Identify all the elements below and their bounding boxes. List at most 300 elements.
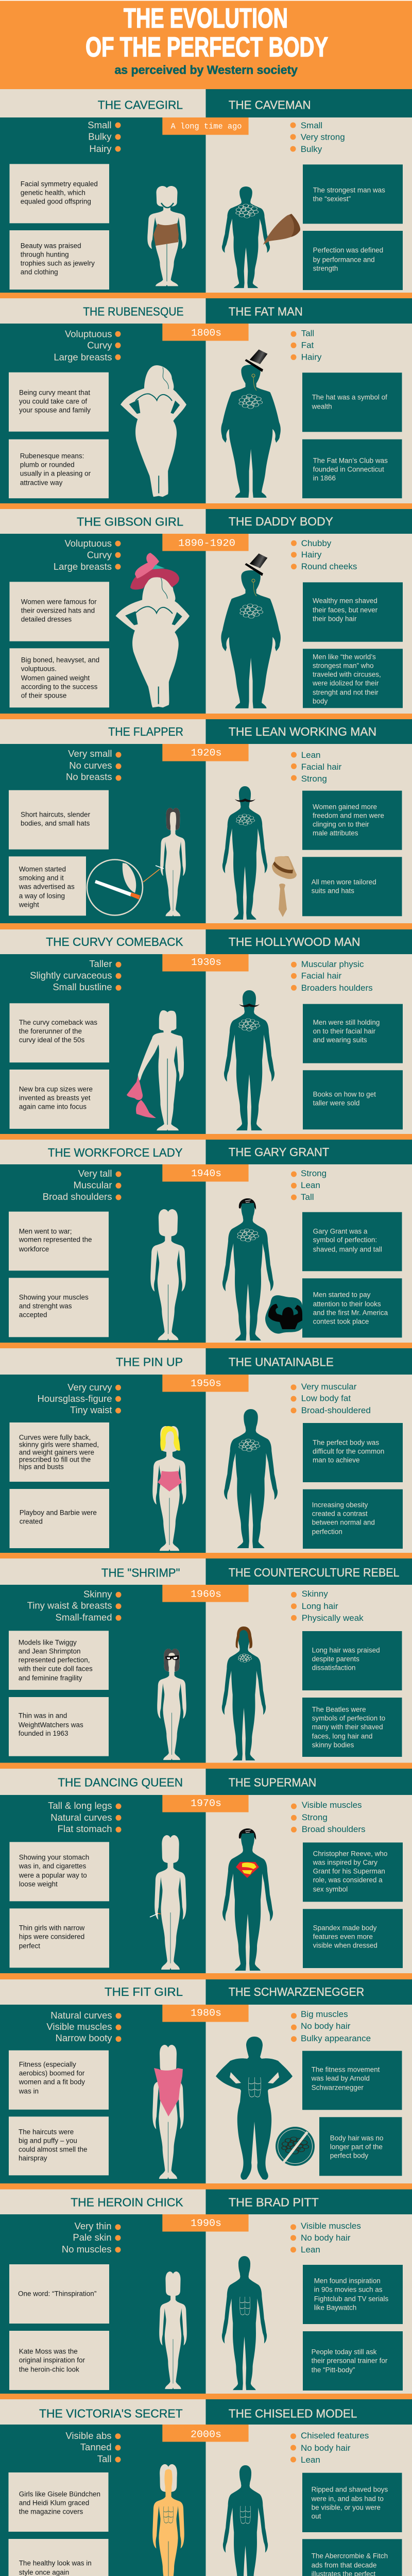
text box xyxy=(303,649,403,708)
section: 1930s xyxy=(0,929,412,1140)
text box: be visible, or you were xyxy=(312,2503,381,2511)
traits: curvy comeback: Slightly curvaceous xyxy=(30,970,112,981)
text box xyxy=(9,230,109,290)
text box: freedom and men were xyxy=(313,811,384,819)
text box xyxy=(302,1278,402,1337)
date tab: A long time ago xyxy=(171,122,242,131)
text box: original inspiration for xyxy=(19,2356,85,2364)
text box: women represented the xyxy=(19,1236,92,1244)
traits: dancing queen: Natural curves xyxy=(50,1812,112,1823)
heading: the rubenesque: THE RUBENESQUE xyxy=(83,304,184,318)
traits: chiseled model: Lean xyxy=(301,2455,320,2465)
text box: Gary Grant was a xyxy=(313,1227,368,1235)
figure: curvy comeback with bra xyxy=(127,1010,184,1130)
text box: Long hair was praised xyxy=(312,1647,380,1654)
text box xyxy=(319,2117,402,2176)
text box xyxy=(303,1004,403,1063)
text box xyxy=(9,1697,109,1756)
text box: Men were still holding xyxy=(313,1019,380,1026)
traits: superman: Strong xyxy=(302,1812,328,1822)
heading: the chiseled model: THE CHISELED MODEL xyxy=(229,2407,357,2420)
figure: victoria's secret xyxy=(152,2464,184,2576)
text box: Rubenesque means: xyxy=(20,452,84,460)
text box: perfection xyxy=(312,1528,342,1535)
traits: gary grant xyxy=(291,1168,327,1202)
text box: traveled with circuses, xyxy=(313,670,381,678)
text box: the forerunner of the xyxy=(19,1027,82,1035)
text box xyxy=(9,648,109,707)
text box: the “sexiest” xyxy=(313,195,351,202)
date tab: 1890-1920 xyxy=(178,537,235,549)
traits: cavegirl: Small xyxy=(88,120,111,130)
text box: The Beatles were xyxy=(312,1705,366,1713)
heading: the shrimp: THE "SHRIMP" xyxy=(101,1566,180,1580)
text box: according to the success xyxy=(21,683,98,690)
text box: a way of losing xyxy=(19,892,65,900)
text box xyxy=(9,372,109,432)
heading: the superman: THE SUPERMAN xyxy=(229,1776,316,1789)
text box: Facial symmetry equaled xyxy=(21,180,98,188)
text box: The hat was a symbol of xyxy=(312,394,387,401)
text box: Big boned, heavyset, and xyxy=(21,656,99,664)
date tab: 1930s xyxy=(191,957,221,968)
text box: shaved, manly and tall xyxy=(313,1245,382,1253)
section background xyxy=(0,1979,412,2190)
date tab: 1970s xyxy=(191,1798,221,1809)
text box: hips were considered xyxy=(19,1933,84,1940)
traits: brad pitt: Lean xyxy=(301,2245,320,2255)
text box: and the first Mr. America xyxy=(313,1309,388,1316)
text box: hairspray xyxy=(19,2154,47,2162)
section background xyxy=(0,1140,412,1349)
figure: cavegirl xyxy=(147,186,186,286)
traits: counterculture rebel: Long hair xyxy=(302,1601,338,1611)
section background xyxy=(0,929,412,1140)
traits: shrimp: Small-framed xyxy=(56,1612,112,1622)
traits: fat man: Fat xyxy=(301,340,314,350)
text box: workforce xyxy=(19,1245,49,1253)
section: 1960s xyxy=(0,1558,412,1769)
section: 1970s xyxy=(0,1769,412,1979)
heading: the flapper: THE FLAPPER xyxy=(108,725,183,738)
date tab xyxy=(162,324,249,341)
text box: Fightclub and TV serials xyxy=(314,2295,389,2302)
heading: the dancing queen: THE DANCING QUEEN xyxy=(58,1776,183,1789)
text box: Women gained more xyxy=(313,803,377,810)
section background xyxy=(0,1348,412,1558)
traits: chiseled model xyxy=(290,2431,369,2465)
text box: again came into focus xyxy=(19,1103,87,1110)
traits: cavegirl xyxy=(88,120,121,154)
text box xyxy=(303,1489,403,1549)
date tab: 1990s xyxy=(191,2217,221,2229)
text box: and wearing suits xyxy=(313,1036,367,1044)
text box xyxy=(302,439,402,498)
heading: the brad pitt: THE BRAD PITT xyxy=(229,2196,319,2209)
text box: role, was considered a xyxy=(313,1876,383,1884)
text box: founded in Connecticut xyxy=(313,465,384,473)
text box: The curvy comeback was xyxy=(19,1019,97,1026)
text box: the magazine covers xyxy=(19,2507,83,2515)
text box: strength xyxy=(313,264,338,272)
date tab xyxy=(162,534,249,551)
date tab: 1980s xyxy=(191,2008,221,2019)
text box: Schwarzenegger xyxy=(312,2083,364,2091)
section: 1980s xyxy=(0,1979,412,2190)
text box: features even more xyxy=(313,1933,373,1940)
heading: the schwarzenegger: THE SCHWARZENEGGER xyxy=(229,1985,364,1998)
text box: loose weight xyxy=(19,1880,58,1888)
traits: heroin chick xyxy=(62,2221,121,2255)
text box xyxy=(9,439,109,498)
heading: the daddy body: THE DADDY BODY xyxy=(229,515,333,528)
text box: hips and busts xyxy=(19,1463,64,1470)
text box: Men like “the world’s xyxy=(313,653,376,660)
traits: schwarzenegger: Big muscles xyxy=(301,2009,348,2019)
text box: created xyxy=(20,1517,43,1525)
text box: male attributes xyxy=(313,829,358,837)
traits: rubenesque: Curvy xyxy=(87,340,112,350)
heading: the fat man: THE FAT MAN xyxy=(229,304,303,318)
figure: schwarzenegger xyxy=(216,2037,293,2180)
traits: fit girl: Narrow booty xyxy=(55,2032,112,2043)
heading: the lean working man: THE LEAN WORKING MAN xyxy=(229,725,376,738)
traits: shrimp: Tiny waist & breasts xyxy=(27,1600,112,1611)
text box: skinny bodies xyxy=(312,1741,354,1749)
date tab: 2000s xyxy=(191,2429,221,2441)
figure: shrimp with glasses xyxy=(157,1649,186,1760)
text box: contest took place xyxy=(313,1317,369,1325)
traits: fat man: Tall xyxy=(301,328,314,338)
traits: gary grant: Strong xyxy=(301,1168,327,1178)
traits: brad pitt: No body hair xyxy=(301,2233,351,2243)
text box: attention to their looks xyxy=(313,1300,381,1308)
traits: flapper xyxy=(66,748,122,782)
text box: curvy ideal of the 50s xyxy=(19,1036,85,1044)
traits: caveman: Very strong xyxy=(301,132,345,142)
text box: Girls like Gisele Bündchen xyxy=(19,2490,100,2498)
traits: caveman xyxy=(290,121,345,154)
section background xyxy=(0,1769,412,1979)
text box: Men found inspiration xyxy=(314,2277,381,2284)
traits: pin up: Tiny waist xyxy=(70,1404,112,1415)
figure: hollywood man xyxy=(224,990,274,1130)
text box: strenght and not their xyxy=(313,689,379,697)
text box: was inspired by Cary xyxy=(313,1858,377,1866)
text box: sex symbol xyxy=(313,1885,348,1893)
text box: Women started xyxy=(19,865,66,873)
figure: chiseled model xyxy=(223,2465,268,2576)
text box xyxy=(303,1070,403,1129)
text box: like Baywatch xyxy=(314,2303,356,2311)
text box: strongest man” who xyxy=(313,662,374,670)
traits: chiseled model: Chiseled features xyxy=(301,2431,369,2441)
text box: Showing your stomach xyxy=(19,1854,89,1861)
text box: smoking and it xyxy=(19,874,64,882)
text box: Books on how to get xyxy=(313,1090,376,1098)
text box xyxy=(9,1631,109,1690)
text box: Men started to pay xyxy=(313,1291,371,1298)
text box: The healthy look was in xyxy=(19,2559,92,2567)
text box: their body hair xyxy=(313,615,357,623)
traits: rubenesque xyxy=(54,328,121,362)
figure: counterculture rebel xyxy=(222,1626,266,1760)
text box: big and puffy – you xyxy=(19,2137,77,2144)
heading: the pin up: THE PIN UP xyxy=(116,1355,183,1369)
text box: by performance and xyxy=(313,256,375,263)
traits: gary grant: Tall xyxy=(301,1192,314,1202)
text box: Increasing obesity xyxy=(312,1501,368,1509)
traits: workforce lady xyxy=(43,1168,122,1202)
traits: counterculture rebel: Skinny xyxy=(302,1589,328,1599)
text box xyxy=(9,1908,109,1968)
text box: man to achieve xyxy=(313,1456,360,1464)
text box: the “Pitt-body” xyxy=(312,2366,355,2374)
traits: unatainable: Very muscular xyxy=(301,1382,357,1392)
text box: your spouse and family xyxy=(19,406,91,414)
figure: brad pitt xyxy=(222,2256,267,2390)
text box xyxy=(9,856,86,916)
traits: heroin chick: Pale skin xyxy=(73,2232,111,2243)
figure: fit girl in leotard xyxy=(152,2045,184,2179)
heading: the victoria's secret: THE VICTORIA'S SECRET xyxy=(39,2407,183,2420)
heading: the cavegirl: THE CAVEGIRL xyxy=(98,98,183,112)
text box: was in xyxy=(19,2087,39,2095)
text box: faces, long hair and xyxy=(312,1732,372,1740)
traits: heroin chick: No muscles xyxy=(62,2244,111,2255)
figure: flapper with cigarette xyxy=(156,808,186,916)
section background xyxy=(0,719,412,929)
traits: victoria's secret: Tanned xyxy=(80,2442,111,2452)
icon: muscle man badge xyxy=(265,1295,302,1334)
date tab xyxy=(162,744,249,761)
text box: the heroin-chic look xyxy=(19,2365,79,2373)
text box: Spandex made body xyxy=(313,1924,377,1931)
text box: could almost smell the xyxy=(19,2145,88,2153)
traits: shrimp: Skinny xyxy=(83,1588,112,1599)
traits: rubenesque: Voluptuous xyxy=(65,328,112,339)
text box: The Abercrombie & Fitch xyxy=(312,2552,388,2560)
traits: brad pitt xyxy=(290,2221,361,2255)
text box: their oversized hats and xyxy=(21,606,95,614)
text box: you could take care of xyxy=(19,398,87,405)
figure: pin up xyxy=(152,1426,186,1551)
date tab: 1940s xyxy=(191,1168,221,1179)
traits: hollywood man: Muscular physic xyxy=(301,959,364,969)
text box: Ripped and shaved boys xyxy=(312,2485,388,2493)
section: 1950s xyxy=(0,1348,412,1558)
text box: genetic health, which xyxy=(21,189,85,197)
heading: the heroin chick: THE HEROIN CHICK xyxy=(71,2196,183,2209)
traits: pin up: Hoursglass-figure xyxy=(38,1393,112,1404)
text box: skinny girls were shamed, xyxy=(19,1440,99,1448)
text box: accepted xyxy=(19,1311,47,1318)
text box: Thin was in and xyxy=(19,1711,67,1719)
text box: Grant for his Superman xyxy=(313,1867,385,1875)
figure: lean working man xyxy=(222,786,267,920)
section: 1920s xyxy=(0,719,412,929)
traits: rubenesque: Large breasts xyxy=(54,351,112,362)
traits: chiseled model: No body hair xyxy=(301,2443,351,2453)
text box: difficult for the common xyxy=(313,1447,384,1455)
traits: lean working man: Strong xyxy=(301,774,327,784)
traits: workforce lady: Broad shoulders xyxy=(43,1191,112,1202)
icon: no body hair badge xyxy=(276,2127,315,2166)
figure: heroin chick xyxy=(159,2272,187,2389)
text box xyxy=(303,231,403,290)
text box xyxy=(302,791,402,850)
traits: counterculture rebel xyxy=(291,1589,364,1623)
text box: created a contrast xyxy=(312,1510,368,1517)
text box xyxy=(9,1070,109,1129)
traits: superman: Visible muscles xyxy=(302,1800,362,1810)
traits: dancing queen xyxy=(48,1800,122,1834)
text box: One word: “Thinspiration” xyxy=(18,2290,96,2297)
text box: of their spouse xyxy=(21,691,66,699)
section: 1940s xyxy=(0,1140,412,1349)
text box: Being curvy meant that xyxy=(19,389,90,397)
heading: the unatainable: THE UNATAINABLE xyxy=(229,1355,334,1369)
date tab xyxy=(162,2214,249,2232)
section background xyxy=(0,2399,412,2576)
traits: lean working man: Lean xyxy=(301,750,321,760)
text box xyxy=(9,164,109,223)
traits: heroin chick: Very thin xyxy=(74,2221,111,2231)
text box: Women gained weight xyxy=(21,674,90,682)
traits: workforce lady: Very tall xyxy=(78,1168,112,1179)
date tab xyxy=(162,1795,249,1812)
text box xyxy=(9,1212,109,1270)
section background xyxy=(0,2190,412,2399)
text box: were a popular way to xyxy=(19,1872,87,1879)
text box: and strenght was xyxy=(19,1302,72,1310)
date tab xyxy=(162,1585,249,1602)
heading: the hollywood man: THE HOLLYWOOD MAN xyxy=(229,935,360,948)
text box: voluptuous. xyxy=(21,665,57,672)
text box: The strongest man was xyxy=(313,186,385,194)
text box: perfect xyxy=(19,1942,40,1950)
traits: fit girl: Visible muscles xyxy=(46,2021,112,2032)
text box: People today still ask xyxy=(312,2348,377,2355)
heading: the gibson girl: THE GIBSON GIRL xyxy=(77,515,183,529)
text box xyxy=(9,790,109,850)
traits: pin up: Very curvy xyxy=(67,1382,112,1393)
figure: fat man with top hat xyxy=(221,349,281,498)
text box xyxy=(8,2472,108,2532)
text box: Curves were fully back, xyxy=(19,1433,91,1441)
text box: usually in a pleasing or xyxy=(20,470,91,478)
text box: was advertised as xyxy=(19,883,75,890)
traits: curvy comeback: Small bustline xyxy=(53,981,112,992)
heading: the gary grant: THE GARY GRANT xyxy=(229,1145,329,1159)
traits: flapper: No breasts xyxy=(66,771,112,782)
date tab xyxy=(162,2425,249,2442)
date tab xyxy=(162,1375,249,1392)
traits: hollywood man: Broaders houlders xyxy=(301,983,373,993)
date tab xyxy=(162,2005,249,2022)
text box: perfect body xyxy=(330,2151,368,2159)
traits: fit girl: Natural curves xyxy=(50,2010,112,2021)
traits: victoria's secret xyxy=(65,2430,121,2464)
text box: WeightWatchers was xyxy=(19,1721,83,1728)
traits: unatainable: Low body fat xyxy=(301,1393,351,1403)
text box xyxy=(8,2539,108,2576)
figure: dancing queen with cigarette xyxy=(150,1835,186,1970)
date tab xyxy=(162,1164,249,1182)
traits: hollywood man: Facial hair xyxy=(301,971,341,981)
traits: fat man xyxy=(290,328,322,362)
text box xyxy=(9,1842,109,1901)
figure: unatainable xyxy=(224,1409,278,1548)
text box xyxy=(302,1698,402,1757)
text box: plumb or rounded xyxy=(20,461,75,469)
traits: gibson girl: Voluptuous xyxy=(64,538,112,549)
text box: Men went to war; xyxy=(19,1227,72,1235)
traits: gibson girl: Large breasts xyxy=(54,561,112,572)
section: 1800s xyxy=(0,298,412,509)
text box xyxy=(303,1842,403,1902)
figure: gibson girl with hat xyxy=(115,553,190,707)
text box: Fitness (especially xyxy=(19,2060,76,2068)
text box: All men wore tailored xyxy=(312,878,376,886)
text box: Wealthy men shaved xyxy=(313,597,377,605)
section background xyxy=(0,89,412,298)
text box: taller were sold xyxy=(313,1099,359,1107)
text box: between normal and xyxy=(312,1518,375,1526)
text box: body xyxy=(313,697,328,705)
subtitle: as perceived by Western society xyxy=(114,63,298,76)
traits: curvy comeback: Taller xyxy=(89,958,112,969)
text box: Women were famous for xyxy=(21,598,97,605)
traits: dancing queen: Flat stomach xyxy=(58,1823,112,1834)
traits: gibson girl: Curvy xyxy=(87,549,112,560)
text box: through hunting xyxy=(21,250,69,258)
text box: and weight gainers were xyxy=(19,1448,94,1456)
text box xyxy=(303,2331,403,2391)
figure: rubenesque xyxy=(121,365,186,497)
text box: women and a fit body xyxy=(19,2078,85,2086)
text box: style once again xyxy=(19,2568,69,2576)
section background xyxy=(0,1558,412,1769)
text box xyxy=(302,372,402,432)
text box xyxy=(303,582,403,642)
traits: superman: Broad shoulders xyxy=(302,1824,366,1834)
text box: Body hair was no xyxy=(330,2134,383,2142)
traits: flapper: Very small xyxy=(68,748,112,759)
text box xyxy=(303,1909,403,1968)
icon: fedora hat xyxy=(272,856,297,879)
traits: brad pitt: Visible muscles xyxy=(301,2221,361,2231)
traits: schwarzenegger: No body hair xyxy=(301,2021,351,2031)
text box: Beauty was praised xyxy=(21,242,81,249)
text box: New bra cup sizes were xyxy=(19,1085,93,1093)
figure: caveman with club xyxy=(222,187,300,288)
traits: dancing queen: Tall & long legs xyxy=(48,1800,112,1811)
text box: longer part of the xyxy=(330,2143,383,2150)
text box: in 1866 xyxy=(313,474,336,482)
traits: shrimp xyxy=(27,1588,122,1622)
traits: caveman: Small xyxy=(301,121,322,130)
text box: founded in 1963 xyxy=(19,1730,68,1737)
text box xyxy=(9,2116,109,2175)
traits: gary grant: Lean xyxy=(301,1180,320,1190)
heading: the counterculture rebel: THE COUNTERCULTURE REBEL xyxy=(229,1566,400,1579)
traits: daddy body: Hairy xyxy=(301,550,322,560)
text box: was in, and cigarettes xyxy=(19,1862,87,1870)
text box: Showing your muscles xyxy=(19,1293,89,1301)
text box: ads from that decade xyxy=(312,2561,376,2569)
text box xyxy=(9,1278,109,1337)
